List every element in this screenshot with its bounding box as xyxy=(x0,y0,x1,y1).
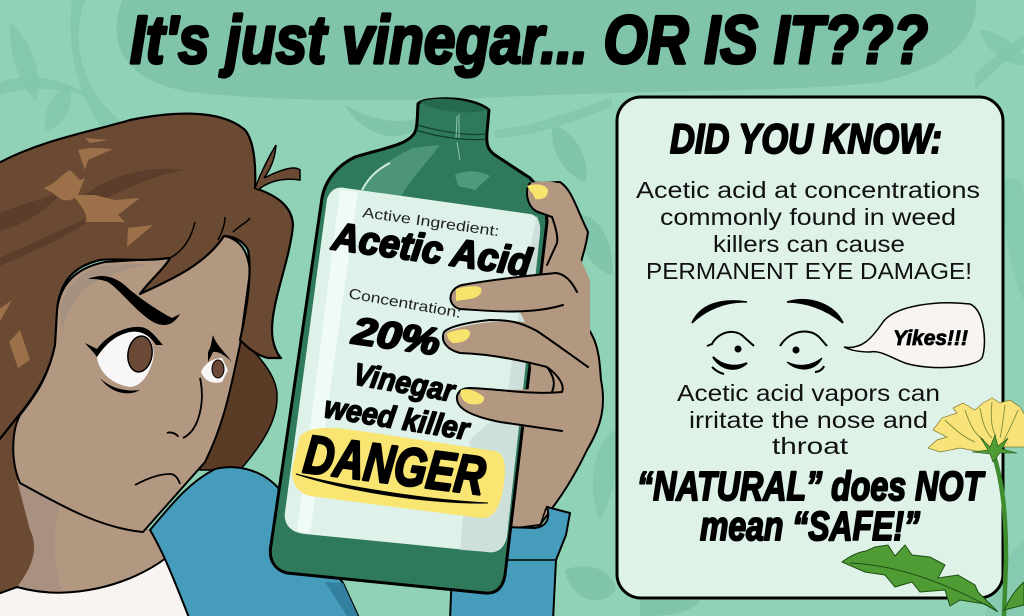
bubble shape xyxy=(844,303,984,368)
icon: worried eyes xyxy=(692,300,843,374)
left iris xyxy=(126,335,154,373)
hand behind bottle xyxy=(500,182,603,530)
character: woman looking at bottle xyxy=(0,114,360,616)
line 2: commonly found in weed xyxy=(660,204,956,230)
bottle cap top xyxy=(420,99,488,112)
neck xyxy=(17,480,166,594)
mouth xyxy=(135,474,180,485)
label text: acetic acid: Acetic Acid xyxy=(329,215,535,285)
label text: concentration: Concentration: xyxy=(347,286,462,322)
nail 3 xyxy=(460,389,484,404)
panel box xyxy=(617,97,1003,598)
hair lock strand xyxy=(170,217,250,258)
finger lines xyxy=(443,183,588,431)
sleeve shade xyxy=(325,582,358,616)
line 2: irritate the nose and xyxy=(689,407,928,433)
hair highlights xyxy=(43,170,140,222)
panel heading: DID YOU KNOW: xyxy=(670,115,942,162)
illustration: dandelion xyxy=(842,398,1024,616)
sleeve seam xyxy=(505,508,555,560)
bottle glint xyxy=(456,114,460,160)
label text: weed killer: weed killer xyxy=(322,389,473,447)
flower head xyxy=(928,398,1024,453)
bottle xyxy=(270,99,547,593)
left eye xyxy=(97,330,154,387)
left pupil xyxy=(734,346,742,352)
flower petal lines xyxy=(945,402,1018,442)
back hair shadow xyxy=(200,340,277,470)
bottle shoulder highlight xyxy=(360,145,440,198)
bottle shoulder glint xyxy=(362,163,390,190)
left upper lash xyxy=(85,327,163,393)
hair dark streaks xyxy=(0,169,185,268)
right brow xyxy=(787,300,843,323)
line 1: Acetic acid vapors can xyxy=(677,380,940,406)
line 3: throat xyxy=(772,433,849,459)
blue sleeve body xyxy=(150,467,360,616)
text block: vapors xyxy=(677,380,940,459)
stem xyxy=(993,452,1006,616)
right pupil xyxy=(792,346,800,354)
bottle body xyxy=(270,99,547,593)
main hair xyxy=(0,114,293,445)
bottle label xyxy=(285,187,540,552)
neck skin xyxy=(54,505,166,590)
nail 1 xyxy=(456,286,481,301)
thumb nail xyxy=(527,184,548,199)
yellow danger highlight xyxy=(292,428,505,518)
nose xyxy=(167,378,202,438)
bottle shine xyxy=(455,171,490,190)
left eyebrow xyxy=(88,276,180,325)
label shine xyxy=(297,190,358,534)
panel: did you know xyxy=(617,97,1003,598)
face xyxy=(13,236,250,532)
right side leaf xyxy=(1004,582,1024,610)
left lower lid xyxy=(713,357,747,369)
nail 2 xyxy=(447,329,470,343)
leaf vein xyxy=(850,563,995,610)
right lower lid xyxy=(787,358,822,369)
finger fills xyxy=(444,181,590,430)
leaf xyxy=(842,545,998,612)
lower left hair xyxy=(0,240,60,594)
hand fingers over bottle xyxy=(443,181,590,431)
right sleeve xyxy=(450,507,570,616)
flower sepals xyxy=(972,435,1017,462)
danger underline xyxy=(296,474,488,503)
callout: natural line 2: mean “SAFE!” xyxy=(700,503,920,549)
label text: danger: DANGER xyxy=(300,424,489,507)
line 4: PERMANENT EYE DAMAGE! xyxy=(646,258,972,284)
label shading xyxy=(460,215,540,552)
line 1: Acetic acid at concentrations xyxy=(636,177,980,203)
right eye xyxy=(780,331,827,372)
bubble text: Yikes!!! xyxy=(893,327,968,350)
right eye xyxy=(201,358,228,383)
label text: active ingredient: Active Ingredient: xyxy=(361,205,500,240)
hair highlight top xyxy=(0,138,153,368)
right brow xyxy=(208,335,232,362)
label text: 20%: 20% xyxy=(349,310,443,364)
speech bubble: yikes xyxy=(844,303,984,368)
label text: vinegar: Vinegar xyxy=(351,356,459,409)
left eye xyxy=(707,332,754,374)
bottle neck band xyxy=(416,125,486,140)
left brow xyxy=(692,301,747,323)
line 3: killers can cause xyxy=(713,231,905,257)
white shirt xyxy=(0,558,190,616)
hair tuft xyxy=(255,145,300,190)
right iris xyxy=(212,360,224,378)
text block: eye damage xyxy=(636,177,980,284)
forehead shade xyxy=(60,264,150,330)
